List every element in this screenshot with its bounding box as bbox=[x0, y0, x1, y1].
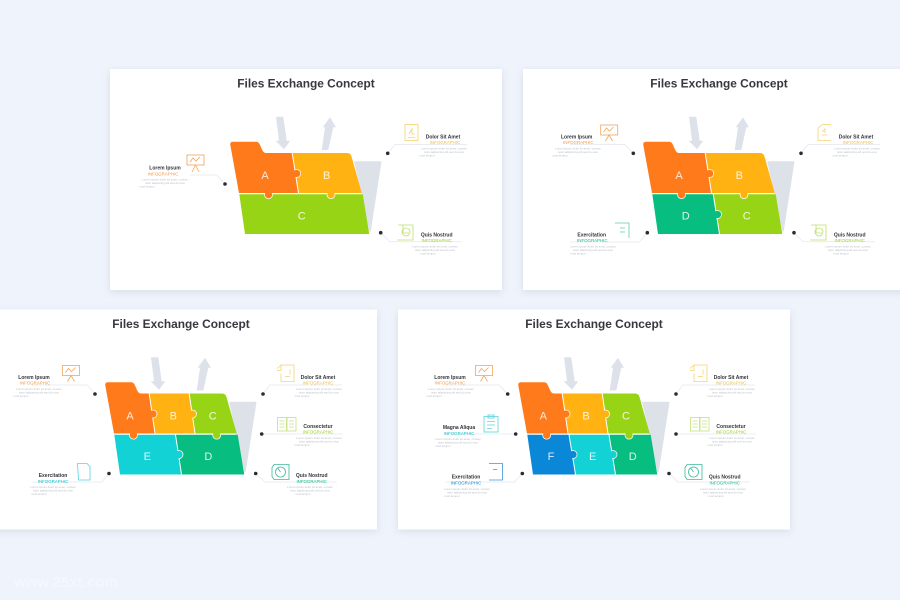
callout: top left bbox=[13, 366, 97, 398]
callout: top right bbox=[386, 124, 467, 158]
callout: top left: mod tempor bbox=[426, 394, 442, 398]
callout: bottom left: tetur adipiscing elit sed do eius bbox=[447, 490, 487, 494]
folder puzzle pieces: A bbox=[126, 410, 134, 422]
callout: bottom left: tetur adipiscing elit sed do eius bbox=[573, 248, 613, 252]
callout: bottom left: INFOGRAPHIC bbox=[451, 480, 481, 486]
callout: top left: Lorem ipsum dolor sit amet, consec bbox=[555, 146, 601, 150]
callout: bottom right: Lorem ipsum dolor sit amet, consec bbox=[700, 487, 746, 491]
callout: top right: Lorem ipsum dolor sit amet, consec bbox=[834, 146, 880, 150]
callout: bottom right: Quis Nostrud bbox=[296, 473, 328, 479]
callout: middle right bbox=[674, 418, 756, 447]
heading: Files Exchange Concept bbox=[112, 317, 250, 331]
callout: bottom right: INFOGRAPHIC bbox=[296, 479, 327, 484]
callout: top left: INFOGRAPHIC bbox=[563, 140, 594, 145]
callout: left: Lorem ipsum dolor sit amet, consec bbox=[142, 178, 188, 182]
callout: top right: INFOGRAPHIC bbox=[303, 380, 333, 386]
callout: top left: Lorem Ipsum bbox=[18, 375, 50, 381]
callout: bottom right bbox=[379, 225, 462, 256]
callout: bottom left: tetur adipiscing elit sed do eius bbox=[33, 488, 73, 492]
folder puzzle pieces: C bbox=[209, 410, 217, 422]
folder puzzle pieces: D bbox=[629, 451, 637, 463]
callout: bottom left: Lorem ipsum dolor sit amet, consec bbox=[570, 244, 616, 248]
arrow: incoming bbox=[564, 357, 578, 390]
callout: bottom right: Lorem ipsum dolor sit amet, consec bbox=[287, 485, 333, 489]
arrow: outgoing bbox=[610, 358, 624, 390]
folder puzzle pieces: C bbox=[298, 210, 306, 222]
callout: top left: tetur adipiscing elit sed do eius bbox=[19, 390, 59, 394]
callout: middle left: Lorem ipsum dolor sit amet, consec bbox=[435, 437, 481, 441]
callout: bottom left: Exercitation bbox=[39, 473, 67, 479]
arrow: outgoing bbox=[197, 358, 211, 390]
callout: bottom right: Quis Nostrud bbox=[834, 232, 866, 238]
folder puzzle pieces bbox=[105, 382, 244, 474]
arrow: incoming bbox=[689, 117, 703, 149]
callout: bottom right: Quis Nostrud bbox=[421, 232, 453, 238]
folder puzzle pieces: A bbox=[261, 170, 269, 182]
callout: top right bbox=[261, 365, 342, 398]
callout: top right: INFOGRAPHIC bbox=[843, 140, 873, 145]
callout: middle left: mod tempor bbox=[435, 444, 451, 448]
callout: middle right: tetur adipiscing elit sed do eius bbox=[299, 440, 339, 444]
folder puzzle pieces bbox=[230, 142, 369, 234]
callout: top right: Dolor Sit Amet bbox=[426, 134, 461, 140]
callout: middle left: Magna Aliqua bbox=[443, 425, 475, 431]
heading: Files Exchange Concept bbox=[650, 76, 788, 90]
folder puzzle pieces: D bbox=[682, 210, 690, 222]
arrow: outgoing bbox=[322, 117, 336, 150]
folder puzzle pieces: C bbox=[622, 410, 630, 422]
callout: bottom right: mod tempor bbox=[420, 252, 436, 256]
callout: bottom right: mod tempor bbox=[833, 252, 849, 256]
callout: bottom right bbox=[254, 464, 337, 496]
callout: top left: Lorem ipsum dolor sit amet, consec bbox=[16, 387, 62, 391]
callout: top left: INFOGRAPHIC bbox=[435, 380, 465, 386]
callout: top right: Lorem ipsum dolor sit amet, consec bbox=[709, 387, 755, 391]
callout: top right: mod tempor bbox=[707, 394, 723, 398]
callout: left: INFOGRAPHIC bbox=[148, 172, 178, 176]
callout: bottom left: Exercitation bbox=[452, 474, 480, 480]
callout: top right: Dolor Sit Amet bbox=[714, 375, 749, 381]
callout: top right: tetur adipiscing elit sed do eius bbox=[299, 390, 339, 394]
callout: left: tetur adipiscing elit sed do eius bbox=[145, 181, 185, 185]
callout: top right: INFOGRAPHIC bbox=[430, 140, 460, 145]
callout: top left: Lorem ipsum dolor sit amet, consec bbox=[428, 387, 474, 391]
folder puzzle pieces: A bbox=[540, 410, 548, 422]
folder puzzle pieces: E bbox=[589, 451, 596, 463]
callout: middle right: tetur adipiscing elit sed do eius bbox=[712, 440, 752, 444]
folder puzzle pieces: A bbox=[675, 170, 683, 182]
callout: middle right: INFOGRAPHIC bbox=[303, 430, 333, 434]
folder puzzle pieces: C bbox=[743, 210, 751, 222]
folder puzzle pieces: E bbox=[144, 451, 151, 463]
callout: left: Lorem Ipsum bbox=[149, 166, 181, 172]
callout: middle right bbox=[260, 418, 343, 447]
callout: bottom left: mod tempor bbox=[444, 494, 460, 498]
heading: Files Exchange Concept bbox=[525, 317, 663, 331]
callout: middle right: Consectetur bbox=[303, 424, 333, 430]
callout: middle right: mod tempor bbox=[707, 443, 723, 447]
callout: bottom right: Quis Nostrud bbox=[709, 474, 741, 480]
folder back bbox=[230, 402, 256, 472]
callout: top left: Lorem Ipsum bbox=[434, 375, 466, 381]
callout: top right: INFOGRAPHIC bbox=[716, 380, 746, 386]
callout: bottom right: Lorem ipsum dolor sit amet, consec bbox=[825, 244, 871, 248]
callout: bottom left: Exercitation bbox=[577, 232, 606, 238]
arrow: incoming bbox=[276, 117, 290, 149]
callout: left bbox=[139, 155, 227, 188]
callout: bottom left: mod tempor bbox=[570, 252, 586, 256]
heading: Files Exchange Concept bbox=[237, 76, 375, 90]
callout: top left: mod tempor bbox=[552, 154, 568, 158]
callout: middle right: Lorem ipsum dolor sit amet, consec bbox=[296, 436, 342, 440]
callout: top right: tetur adipiscing elit sed do eius bbox=[837, 150, 877, 154]
callout: bottom right: tetur adipiscing elit sed do eius bbox=[290, 488, 330, 492]
callout: bottom right: tetur adipiscing elit sed do eius bbox=[828, 248, 868, 252]
callout: top left: INFOGRAPHIC bbox=[20, 380, 50, 386]
arrow: incoming bbox=[151, 357, 165, 390]
callout: top right: mod tempor bbox=[294, 394, 310, 398]
folder puzzle pieces: F bbox=[548, 451, 555, 463]
callout: bottom right: Lorem ipsum dolor sit amet, consec bbox=[412, 244, 458, 248]
callout: top right: tetur adipiscing elit sed do eius bbox=[424, 150, 464, 154]
callout: bottom left bbox=[30, 464, 111, 496]
callout: bottom left bbox=[570, 223, 649, 256]
callout: top left bbox=[426, 366, 510, 398]
callout: bottom left bbox=[444, 464, 524, 498]
callout: bottom right: INFOGRAPHIC bbox=[421, 238, 452, 243]
callout: top left bbox=[552, 125, 635, 158]
callout: bottom right: tetur adipiscing elit sed do eius bbox=[703, 490, 743, 494]
callout: bottom right: mod tempor bbox=[708, 494, 724, 498]
folder puzzle pieces: B bbox=[736, 170, 743, 182]
callout: left: mod tempor bbox=[139, 184, 155, 188]
callout: bottom left: Lorem ipsum dolor sit amet, consec bbox=[444, 487, 490, 491]
callout: top left: tetur adipiscing elit sed do eius bbox=[431, 390, 471, 394]
callout: bottom left: INFOGRAPHIC bbox=[38, 479, 68, 484]
callout: top right: tetur adipiscing elit sed do eius bbox=[712, 390, 752, 394]
callout: middle right: Lorem ipsum dolor sit amet, consec bbox=[709, 436, 755, 440]
folder puzzle pieces bbox=[643, 142, 782, 234]
callout: bottom right bbox=[667, 464, 750, 498]
panel: five-piece folder bbox=[0, 310, 377, 530]
folder puzzle pieces bbox=[518, 382, 657, 474]
folder back bbox=[355, 162, 381, 231]
callout: bottom left: mod tempor bbox=[31, 492, 47, 496]
callout: middle right: mod tempor bbox=[294, 443, 310, 447]
panel: three-piece folder bbox=[110, 69, 502, 290]
folder puzzle pieces: B bbox=[323, 170, 330, 182]
callout: top left: mod tempor bbox=[13, 394, 29, 398]
folder puzzle pieces: B bbox=[582, 410, 590, 422]
callout: bottom right: INFOGRAPHIC bbox=[834, 238, 865, 243]
callout: bottom right: tetur adipiscing elit sed do eius bbox=[415, 248, 455, 252]
panel: six-piece folder bbox=[398, 310, 790, 530]
watermark: www.25xt.com bbox=[13, 574, 118, 591]
callout: top right: Dolor Sit Amet bbox=[839, 134, 874, 140]
callout: middle right: Consectetur bbox=[716, 424, 746, 430]
callout: bottom right: mod tempor bbox=[295, 492, 311, 496]
folder puzzle pieces: B bbox=[170, 410, 177, 422]
callout: middle left bbox=[435, 415, 518, 448]
arrow: outgoing bbox=[735, 117, 749, 150]
callout: middle left: INFOGRAPHIC bbox=[444, 431, 474, 436]
callout: top right: Lorem ipsum dolor sit amet, consec bbox=[421, 146, 467, 150]
folder back bbox=[643, 402, 669, 472]
callout: bottom right: INFOGRAPHIC bbox=[709, 480, 740, 486]
callout: bottom left: Lorem ipsum dolor sit amet, consec bbox=[30, 485, 76, 489]
callout: top right bbox=[674, 365, 755, 398]
folder puzzle pieces: D bbox=[204, 451, 212, 463]
callout: top right: Lorem ipsum dolor sit amet, consec bbox=[296, 387, 342, 391]
callout: bottom left: INFOGRAPHIC bbox=[577, 238, 608, 243]
folder back bbox=[768, 162, 794, 231]
callout: top right: mod tempor bbox=[832, 154, 848, 158]
callout: top left: Lorem Ipsum bbox=[561, 134, 593, 140]
callout: top right: mod tempor bbox=[419, 154, 435, 158]
callout: bottom right bbox=[792, 225, 875, 256]
callout: middle left: tetur adipiscing elit sed do eius bbox=[438, 440, 478, 444]
callout: top right: Dolor Sit Amet bbox=[301, 375, 336, 381]
callout: middle right: INFOGRAPHIC bbox=[716, 430, 746, 434]
panel: four-piece folder bbox=[523, 69, 900, 290]
callout: top right bbox=[799, 124, 880, 158]
callout: top left: tetur adipiscing elit sed do eius bbox=[558, 150, 598, 154]
